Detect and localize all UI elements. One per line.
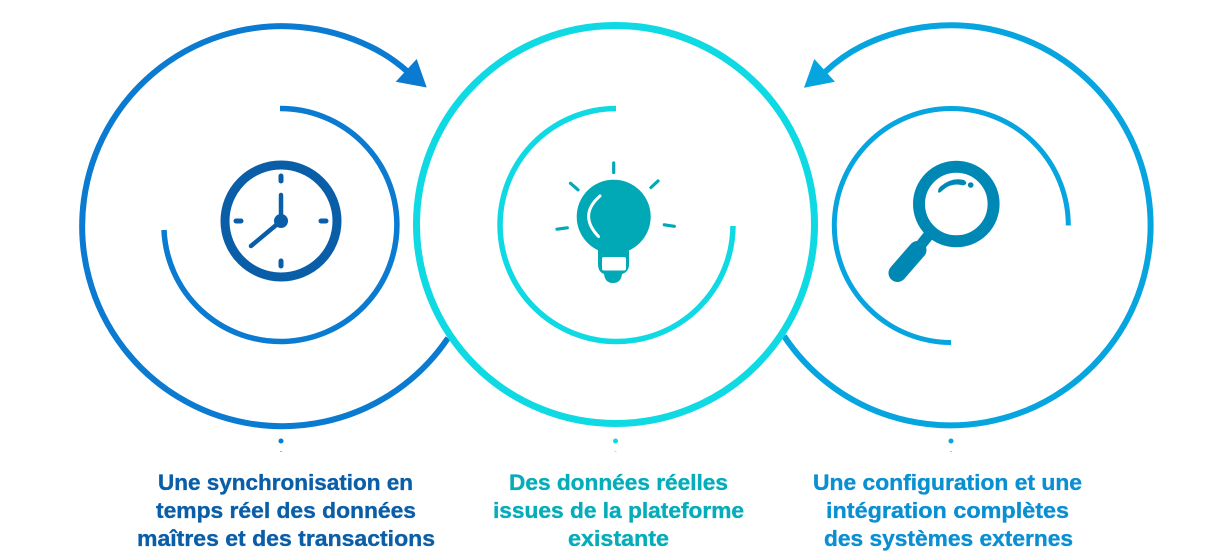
text block: right caption: intégration complètes [826, 498, 1069, 523]
middle inner arc [500, 108, 733, 341]
text block: left caption: temps réel des données [156, 498, 416, 523]
right inner arc [834, 109, 1068, 342]
text block: middle caption: issues de la plateforme [493, 498, 744, 523]
text block: middle caption: Des données réelles [509, 470, 728, 495]
text block: right caption [813, 470, 1082, 551]
text block: middle caption [493, 470, 744, 551]
middle outer ring [416, 26, 814, 424]
text block: right caption: Une configuration et une [813, 470, 1082, 495]
left outer arc with arrow [82, 26, 448, 426]
icon: clock [225, 165, 337, 277]
text block: left caption: maîtres et des transactions [137, 526, 435, 551]
left inner arc [164, 108, 397, 341]
panel: right cycle [784, 25, 1151, 452]
text block: left caption: Une synchronisation en [158, 470, 413, 495]
panel: middle cycle [416, 26, 814, 452]
text block: left caption [137, 470, 435, 551]
connector dot [278, 438, 284, 452]
right outer arc with arrow [784, 25, 1151, 425]
panel: left cycle [82, 26, 448, 452]
text block: right caption: des systèmes externes [824, 526, 1073, 551]
connector dot [613, 438, 618, 452]
icon: light bulb [557, 163, 674, 283]
connector dot [948, 438, 954, 452]
icon: magnifying glass [898, 167, 994, 273]
text block: middle caption: existante [568, 526, 669, 551]
